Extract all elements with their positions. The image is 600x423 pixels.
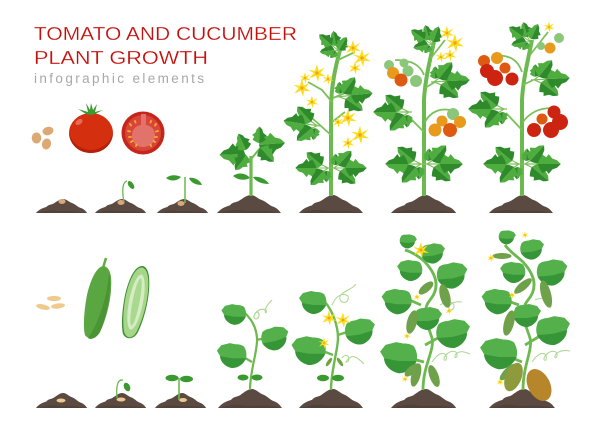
cucumber seeds xyxy=(36,296,65,311)
tomato stage 5 flowering plant xyxy=(280,22,375,213)
cucumber stage 6 plant with fruit xyxy=(380,233,472,408)
subtitle: infographic elements xyxy=(34,71,204,86)
tomato stage 3 seedling xyxy=(157,175,208,213)
tomato stage 7 ripe fruit xyxy=(468,13,571,213)
whole cucumber xyxy=(84,258,111,339)
tomato stage 6 green and orange fruit xyxy=(373,16,471,213)
cucumber slice xyxy=(122,266,149,338)
tomato seeds xyxy=(32,126,54,150)
tomato slice xyxy=(122,112,164,154)
cucumber seed in soil xyxy=(56,398,66,402)
tomato stage 2 sprout xyxy=(95,180,146,213)
tomato stage 4 young plant xyxy=(217,126,286,213)
soil: tomato stage 1 xyxy=(36,199,87,213)
cucumber stage 4 young plant xyxy=(217,300,291,408)
cucumber stage 3 seedling xyxy=(155,375,206,408)
seed in soil 1 xyxy=(58,199,66,204)
title second line: PLANT GROWTH xyxy=(34,47,208,68)
soil: cucumber stage 1 xyxy=(36,393,87,408)
cucumber stage 2 sprout xyxy=(95,380,146,408)
cucumber stage 7 plant with ripe fruit xyxy=(480,229,572,408)
title: TOMATO AND CUCUMBER xyxy=(34,23,297,44)
whole tomato xyxy=(69,103,113,153)
cucumber stage 5 flowering plant xyxy=(292,284,377,408)
